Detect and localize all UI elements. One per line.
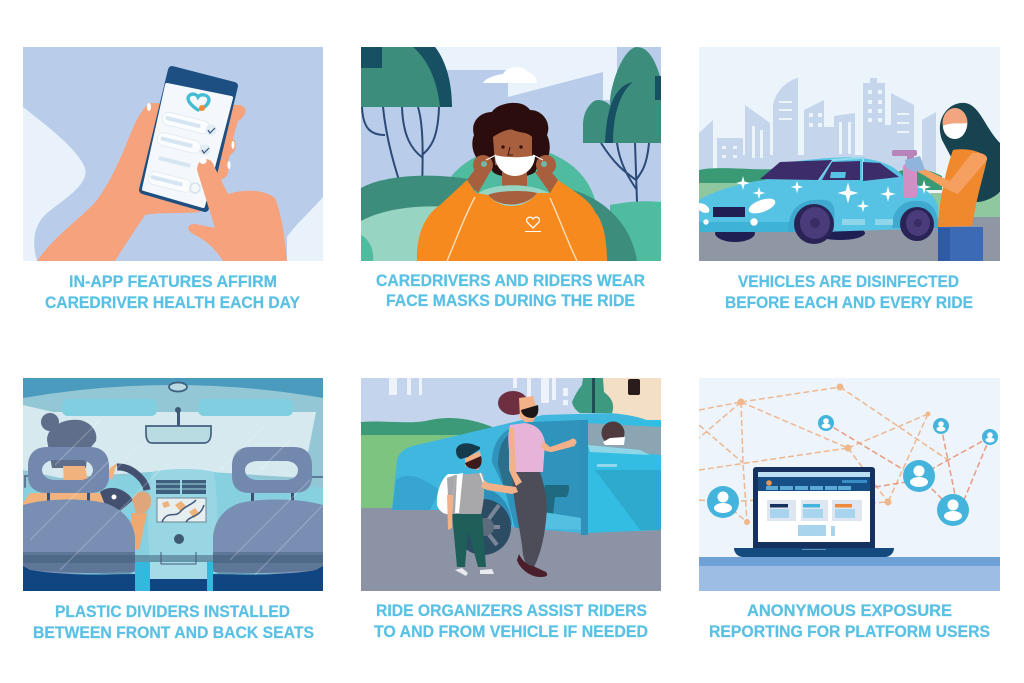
rear-view mirror — [146, 407, 211, 443]
spray bottle — [892, 150, 917, 198]
sparkles — [736, 176, 931, 212]
icon: app heart logo — [188, 94, 209, 111]
blue car — [695, 157, 938, 244]
panel: plastic dividers in car interior — [23, 378, 323, 591]
panel: face masks — [361, 47, 661, 283]
hills and ground — [361, 418, 661, 591]
sun visors — [62, 399, 293, 416]
arm and hand — [131, 513, 147, 550]
collar — [478, 185, 549, 206]
air vents — [156, 480, 206, 494]
windshield — [23, 405, 316, 478]
left tree — [361, 47, 452, 178]
caption: in-app features: IN-APP FEATURES AFFIRM — [69, 273, 277, 291]
driver — [23, 413, 151, 550]
panel: in-app health check — [23, 47, 323, 261]
icon: pointing hand — [147, 103, 287, 261]
panel: vehicle disinfection — [695, 47, 1000, 261]
caption: ride organizers — [374, 602, 648, 641]
car windows — [760, 160, 899, 181]
hills — [361, 152, 661, 261]
building windows — [722, 90, 909, 158]
passenger seat with headrest — [213, 447, 323, 575]
driver with mask — [602, 422, 625, 445]
caption: disinfection — [725, 273, 973, 312]
front wheel — [455, 489, 512, 555]
wheel arches and wheels — [788, 200, 835, 232]
steering wheel — [117, 467, 147, 490]
caption: in-app features: CAREDRIVER HEALTH EACH DAY — [45, 294, 300, 312]
dome light — [169, 382, 187, 392]
dashboard — [23, 472, 323, 574]
caption: ride organizers: TO AND FROM VEHICLE IF NEEDED — [374, 623, 648, 641]
desk — [699, 557, 1000, 591]
distant buildings — [389, 378, 568, 405]
arms and hands — [467, 168, 490, 193]
knob — [174, 534, 184, 544]
hair — [472, 103, 550, 172]
caption: anonymous exposure — [709, 602, 990, 641]
caption: face masks: CAREDRIVERS AND RIDERS WEAR — [376, 272, 645, 290]
caption: anonymous exposure: ANONYMOUS EXPOSURE — [747, 602, 952, 620]
beige building — [603, 378, 661, 420]
ground and hills — [699, 168, 1000, 261]
right tree — [583, 47, 661, 202]
panel: ride organizers assist riders — [361, 378, 661, 591]
person wearing mask — [417, 103, 607, 261]
caption: face masks: FACE MASKS DURING THE RIDE — [386, 292, 635, 310]
caption: anonymous exposure: REPORTING FOR PLATFORM USERS — [709, 623, 990, 641]
caption: ride organizers: RIDE ORGANIZERS ASSIST RIDERS — [376, 602, 647, 620]
panel: anonymous exposure reporting — [699, 378, 1000, 591]
side mirror arms — [24, 475, 323, 488]
navigation map screen — [157, 498, 206, 522]
caption: plastic dividers: BETWEEN FRONT AND BACK SEATS — [33, 624, 314, 642]
white mask — [495, 155, 535, 176]
ear straps — [486, 155, 543, 160]
caption: disinfection: VEHICLES ARE DISINFECTED — [738, 273, 959, 291]
woman with spray bottle — [892, 103, 1000, 261]
tree — [572, 378, 613, 413]
orange sweater — [417, 180, 607, 261]
icon: left hand holding phone — [37, 103, 246, 261]
driver seat with headrest — [23, 447, 135, 575]
icon: smartphone — [143, 70, 234, 208]
caption: plastic dividers — [33, 603, 314, 642]
icon: sweater logo — [525, 217, 541, 232]
dashboard cards — [767, 500, 862, 536]
woman helping rider — [498, 391, 576, 577]
browser screen — [758, 472, 870, 542]
city skyline — [699, 78, 936, 175]
checklist rows — [147, 111, 216, 194]
laptop — [734, 467, 894, 557]
caption: face masks — [376, 272, 645, 310]
icon: cloud — [483, 67, 537, 83]
grille and lights — [713, 207, 745, 217]
plastic divider reflections — [30, 420, 323, 575]
floor and console — [23, 552, 323, 591]
network dashed lines — [699, 387, 948, 522]
caption: plastic dividers: PLASTIC DIVIDERS INSTALLED — [55, 603, 290, 621]
child rider with backpack — [437, 443, 518, 576]
door — [580, 420, 661, 533]
ceiling and pillars — [23, 385, 323, 488]
caption: disinfection: BEFORE EACH AND EVERY RIDE — [725, 294, 973, 312]
user icons — [707, 415, 998, 526]
blue car with open door — [392, 413, 661, 555]
network nodes — [738, 384, 930, 525]
caption: in-app features — [45, 273, 300, 312]
car interior — [492, 420, 583, 530]
